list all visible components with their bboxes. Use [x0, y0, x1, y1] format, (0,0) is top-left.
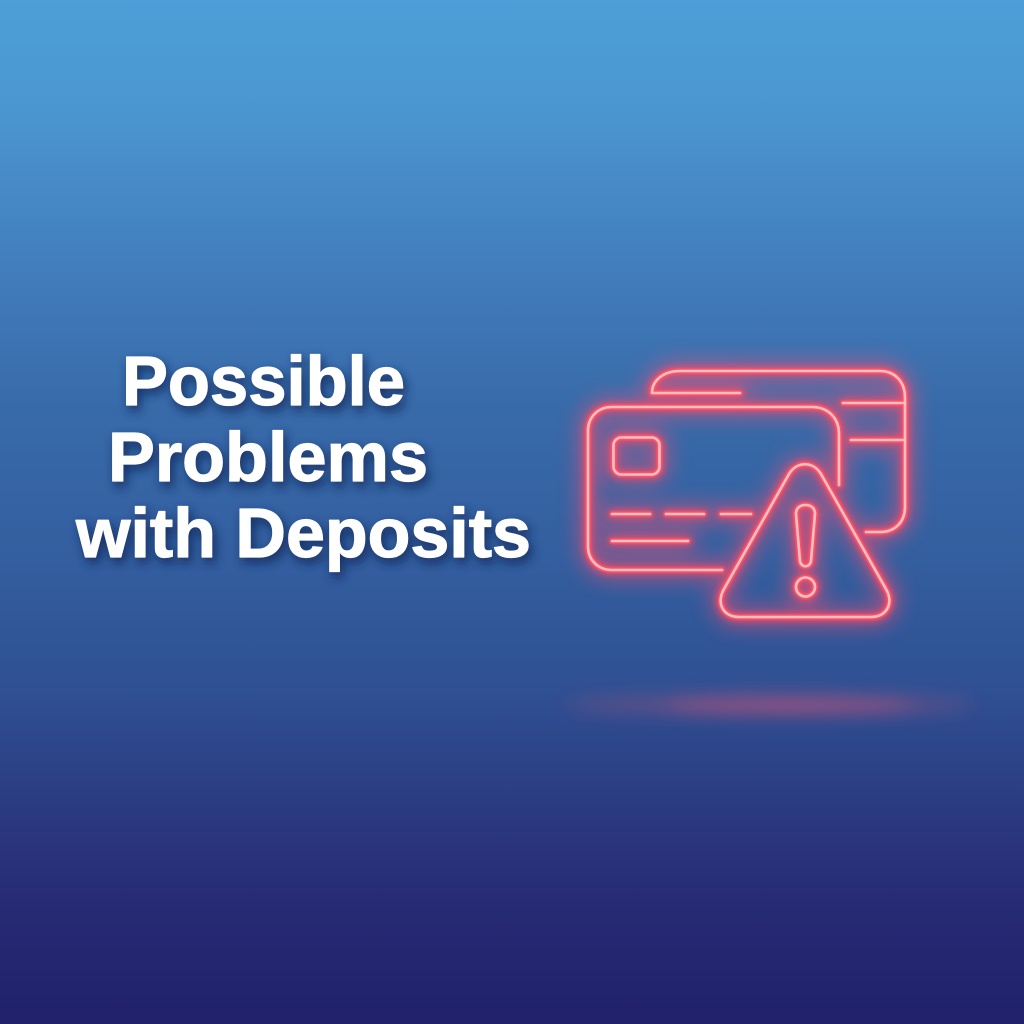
title shadow: [78, 347, 534, 577]
floor reflection glow: [565, 696, 975, 714]
title text: with Deposits: [75, 494, 531, 572]
icon: near glow: [588, 371, 905, 617]
title: [75, 342, 534, 577]
title text: Problems: [108, 418, 428, 496]
title text: [75, 342, 531, 572]
icon: neon tube colour: [588, 371, 905, 617]
icon: wide outer glow: [588, 371, 905, 617]
title shadow: with Deposits: [78, 499, 534, 577]
title text: Possible: [122, 342, 405, 420]
title shadow: Possible: [125, 347, 408, 425]
title shadow: Problems: [111, 423, 431, 501]
icon: bright neon core: [588, 371, 905, 617]
icon: neon credit cards with warning triangle: [588, 371, 905, 617]
